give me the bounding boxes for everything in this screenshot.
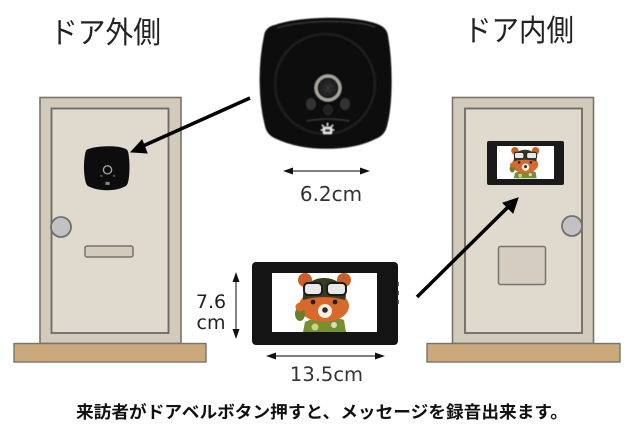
caption: 来訪者がドアベルボタン押すと、メッセージを録音出来ます。 [76,402,568,422]
dimension: camera width [283,168,370,206]
lens [316,76,340,100]
heading: outside door: ドア外側 [50,17,161,50]
dimension: monitor height: 7.6 [196,291,226,313]
dimension: camera width: 6.2cm [300,182,362,206]
bell button [307,119,349,134]
door: outside [14,98,206,362]
door: inside [427,98,620,362]
bear mascot [510,147,539,178]
screen [497,146,554,179]
mini monitor on door [487,141,564,185]
dimension: monitor width: 13.5cm [290,363,363,386]
mail slot [85,246,133,257]
door knob [51,217,71,237]
door step [14,344,206,362]
dimension: monitor width [266,352,385,386]
screen [272,273,377,332]
arrow: monitor to door [417,198,518,297]
door step [427,344,620,362]
dimension: monitor height [196,272,240,339]
arrow: camera to door [131,98,250,153]
large door monitor [252,262,398,345]
door knob [562,216,582,236]
panel [498,246,546,284]
large doorbell camera [262,20,390,147]
side buttons [397,282,399,304]
heading: inside door: ドア内側 [464,15,574,48]
dimension: monitor height: cm [197,312,225,334]
bear mascot [295,273,351,332]
small doorbell camera on door [85,147,129,190]
